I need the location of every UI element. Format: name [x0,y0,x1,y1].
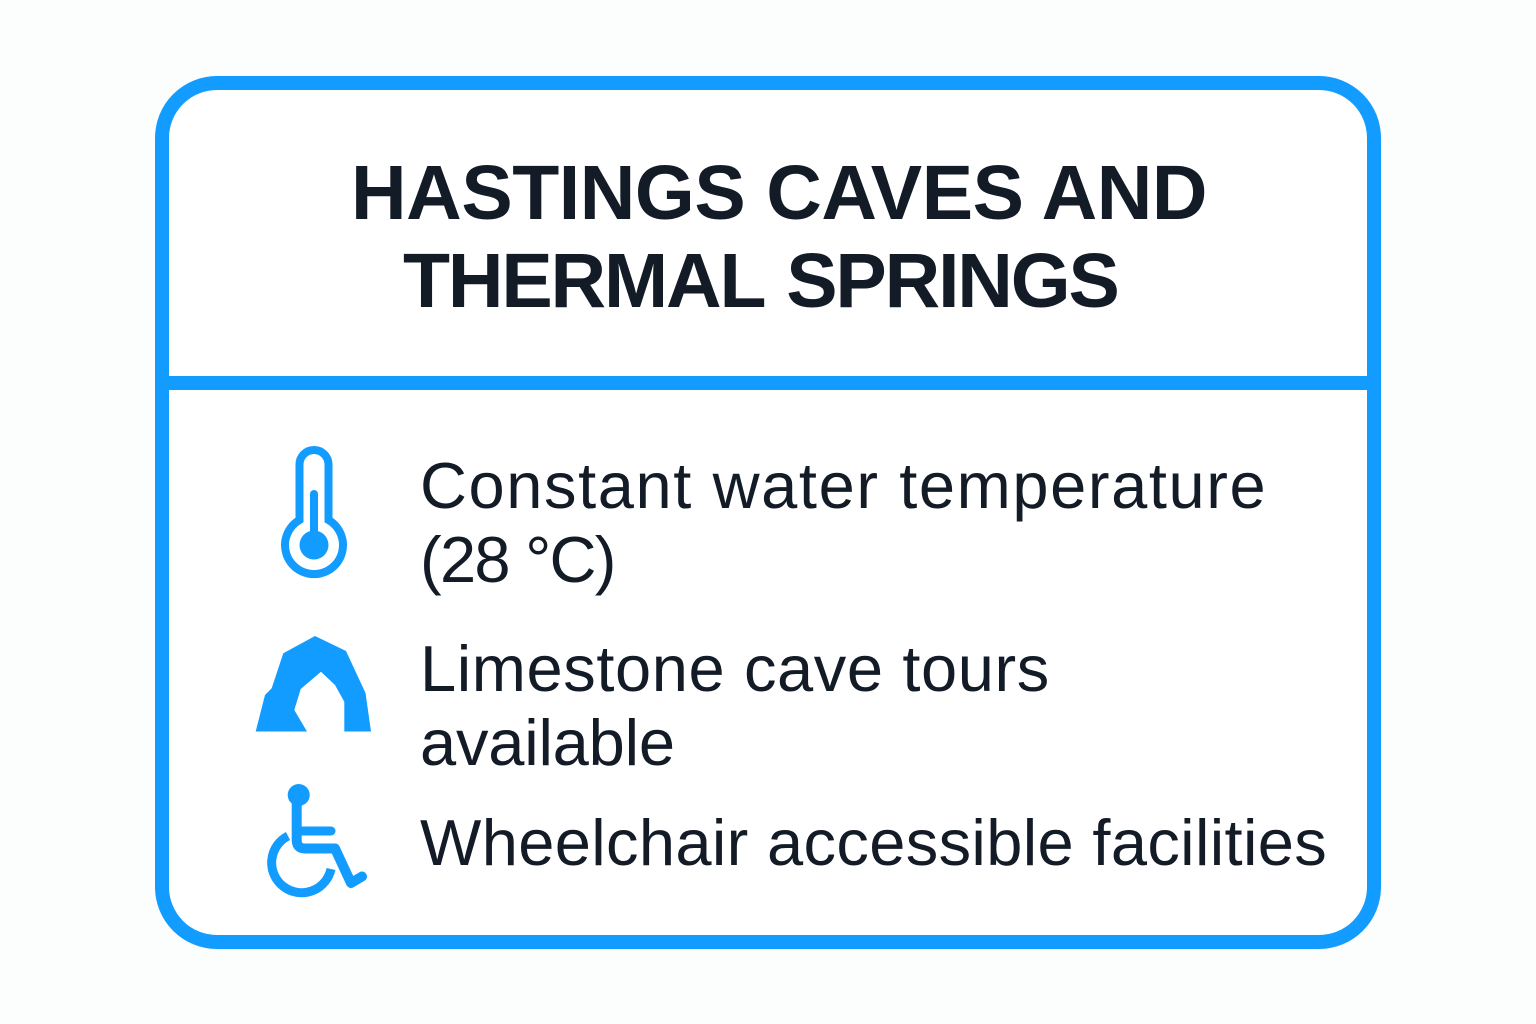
text: cave tours [420,632,1050,779]
title: THERMAL SPRINGS [403,238,1118,324]
text: water temperature: Constant water temperature [420,449,1267,522]
icon: wheelchair [267,784,367,898]
title: HASTINGS CAVES AND [351,150,1207,236]
title [351,150,1207,324]
text: cave tours: available [420,706,675,779]
text: cave tours: Limestone cave tours [420,632,1050,705]
icon: thermometer [281,446,347,578]
text: water temperature: (28 °C) [420,523,615,596]
text: water temperature [420,449,1267,596]
text: wheelchair access: Wheelchair accessible facilities [420,806,1327,879]
icon: limestone cave [256,636,371,732]
divider between title and list [160,376,1376,390]
panel: info card [155,76,1381,949]
